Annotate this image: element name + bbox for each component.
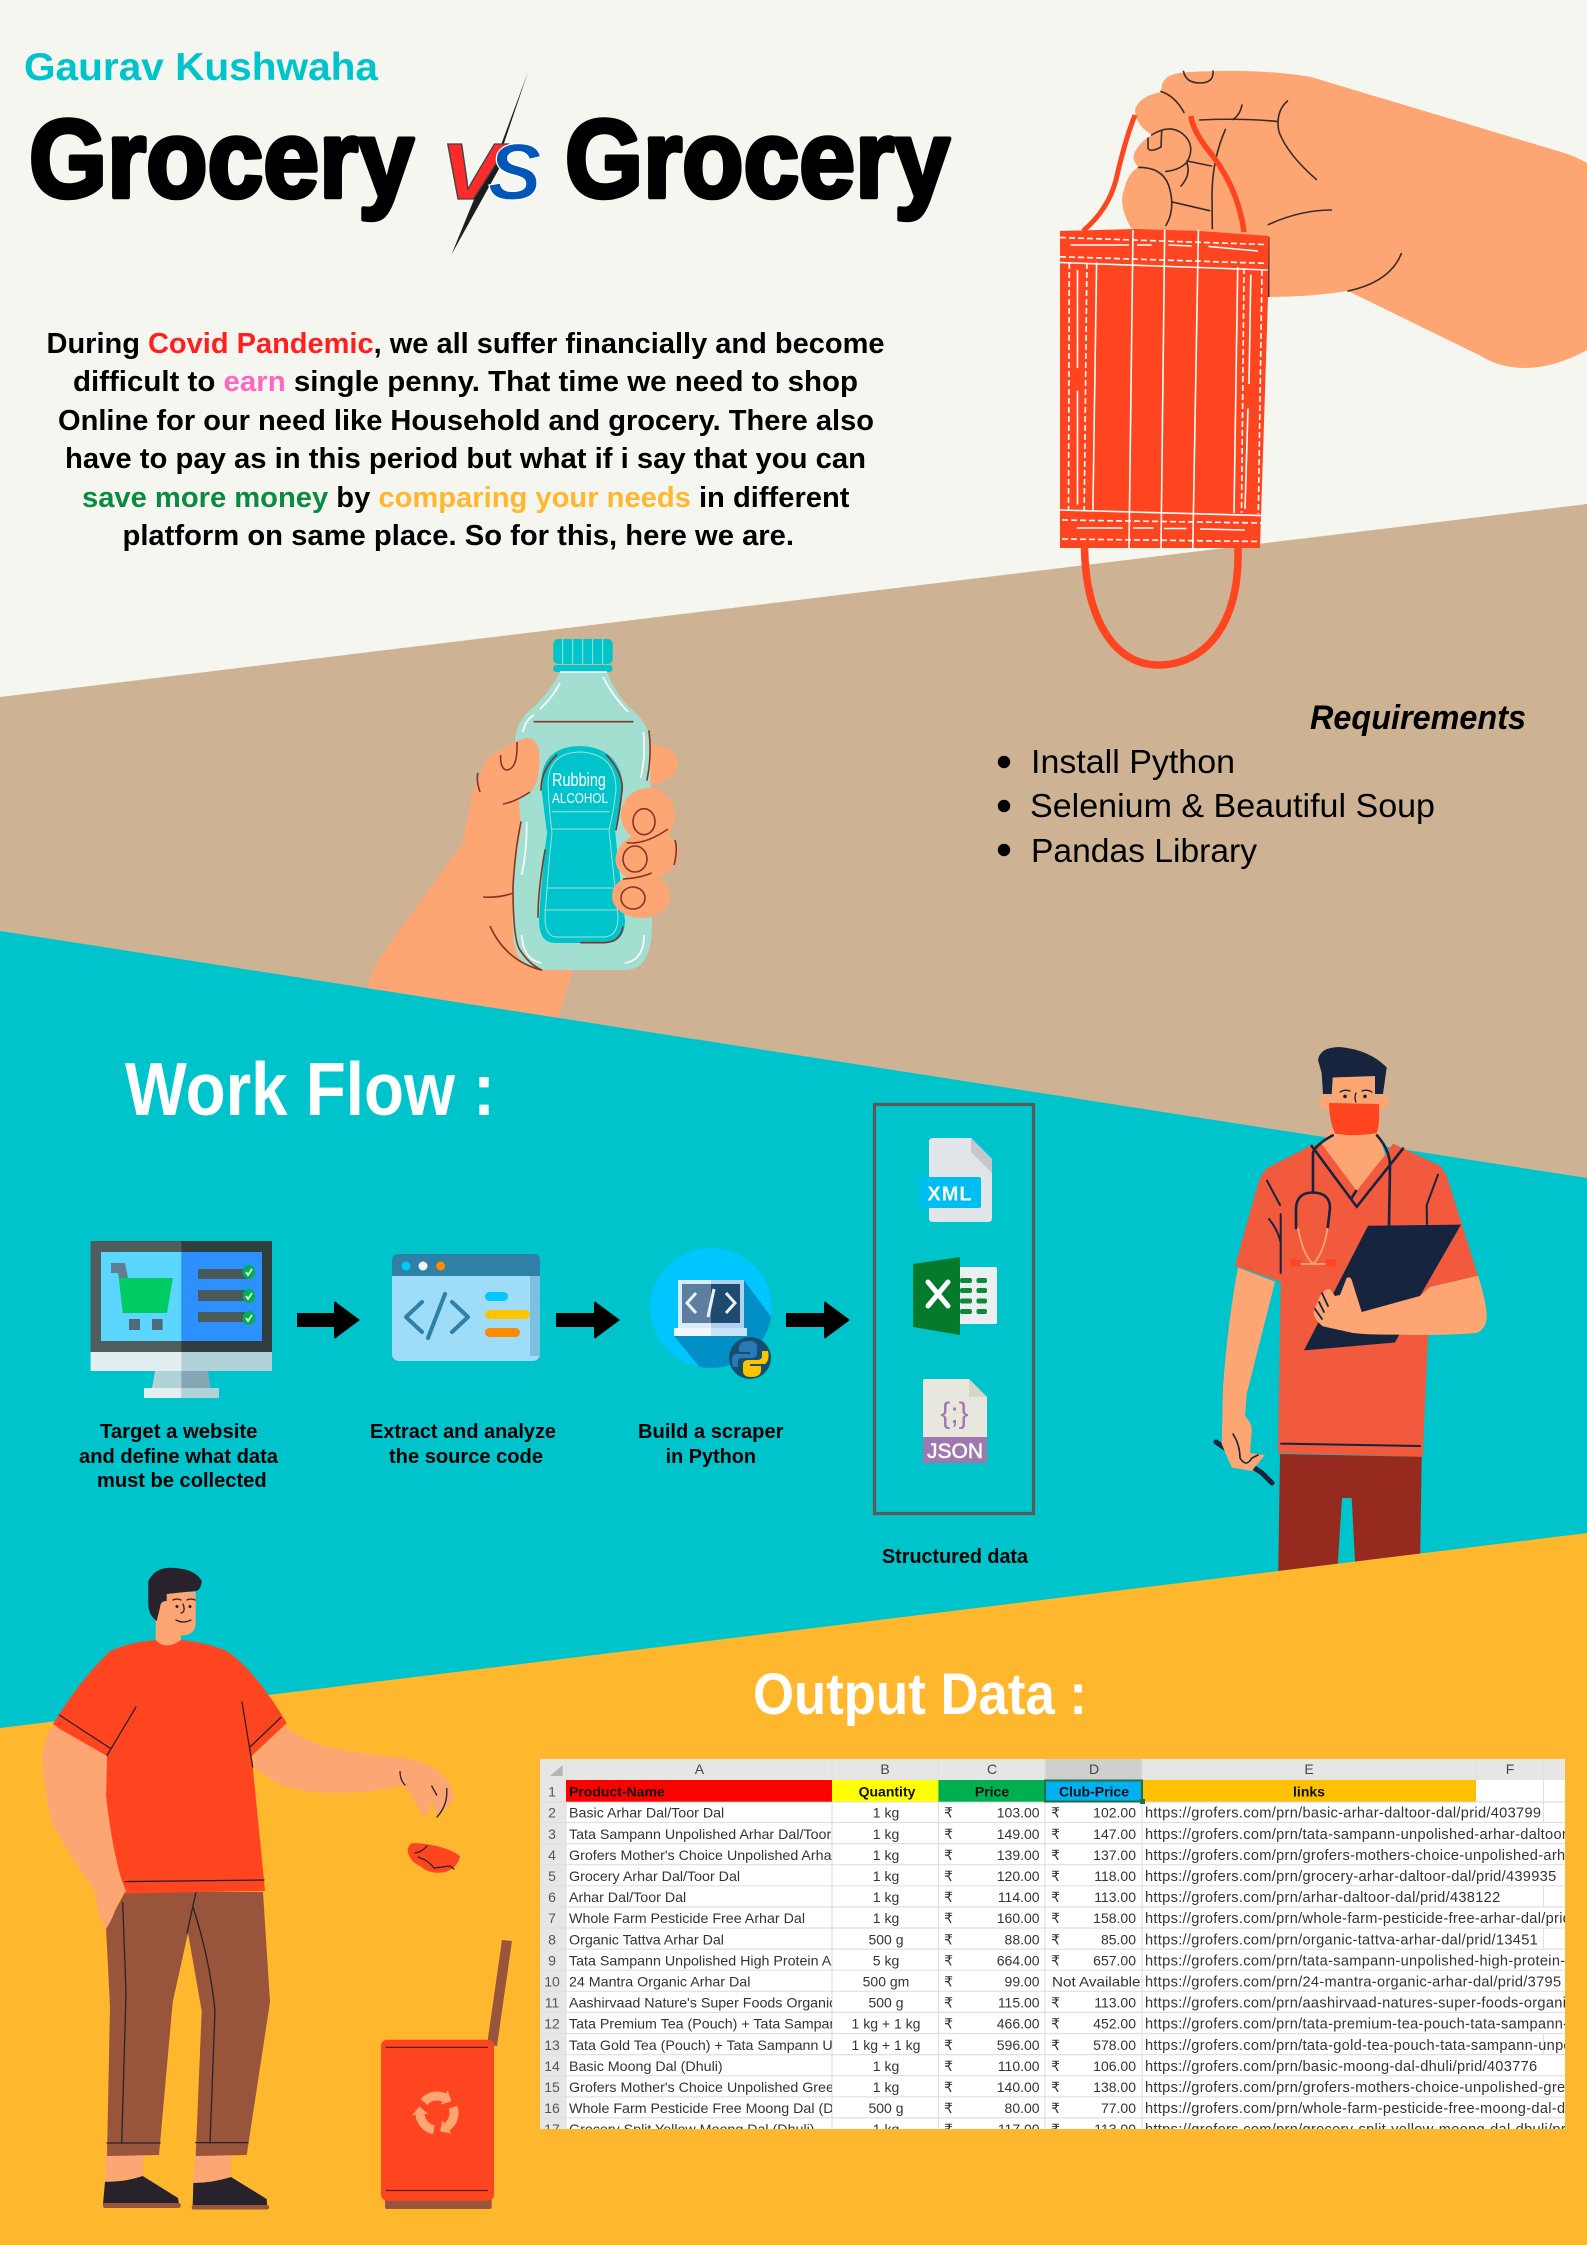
right arm	[253, 1725, 453, 1818]
price column: 466.00	[997, 2016, 1040, 2032]
workflow heading: Work Flow :	[125, 1047, 495, 1131]
price column: ₹	[944, 1868, 953, 1884]
price column: ₹	[944, 2079, 953, 2095]
row numbers: 6	[548, 1889, 556, 1905]
club price column: 452.00	[1093, 2016, 1136, 2032]
links column: https://grofers.com/prn/basic-arhar-daltoor-dal/prid/403799	[1145, 1806, 1541, 1822]
row numbers: 17	[544, 2121, 560, 2137]
club price column: ₹	[1051, 1889, 1060, 1905]
arrow 3	[786, 1302, 850, 1338]
finger and thumb lines	[477, 742, 676, 970]
links column: https://grofers.com/prn/arhar-daltoor-dal/prid/438122	[1145, 1890, 1501, 1906]
price column: ₹	[944, 1995, 953, 2011]
row number strip	[540, 1780, 566, 2129]
shoes	[103, 2176, 269, 2210]
t-shirt	[53, 1640, 287, 1894]
title: first word: Grocery	[29, 98, 414, 221]
price column: 117.00	[998, 2121, 1040, 2137]
links column: https://grofers.com/prn/tata-premium-tea-pouch-tata-sampann-dal	[1145, 2017, 1587, 2033]
scrub seams	[1267, 1146, 1438, 1446]
hand and arm	[1122, 71, 1587, 368]
quantity column: 5 kg	[873, 1952, 899, 1968]
background: yellow band	[0, 1533, 1587, 2245]
icon: JSON file: JSON	[927, 1440, 983, 1463]
quantity column	[852, 1805, 920, 2137]
quantity column: 1 kg	[873, 1805, 899, 1821]
price column: 160.00	[997, 1910, 1040, 1926]
quantity column: 1 kg	[873, 1910, 899, 1926]
illustration: hand palm behind bottle	[360, 745, 678, 1025]
illustration: hand holding face mask	[1060, 71, 1587, 665]
icon: recycle symbol	[410, 2090, 463, 2137]
face and ears	[1319, 1077, 1389, 1137]
icon: JSON file: {;}	[940, 1397, 969, 1430]
structured data box	[874, 1104, 1034, 1568]
illustration: man dropping trash in recycling bin	[42, 1568, 512, 2210]
intro paragraph: Online for our need like Household and grocery. There also	[58, 405, 874, 437]
thumb	[470, 738, 540, 805]
quantity column: 1 kg + 1 kg	[852, 2016, 920, 2032]
author name: Gaurav Kushwaha	[24, 46, 378, 89]
product names column: Basic Moong Dal (Dhuli)	[569, 2059, 723, 2075]
product names column: Arhar Dal/Toor Dal	[569, 1890, 686, 1906]
intro paragraph	[46, 328, 884, 552]
club price column: ₹	[1051, 1995, 1060, 2011]
club price column: 158.00	[1093, 1910, 1136, 1926]
price column: 88.00	[1005, 1931, 1040, 1947]
caption: extract and analyze	[370, 1420, 556, 1468]
caption: extract and analyze: Extract and analyze	[370, 1420, 556, 1443]
price column: ₹	[944, 1931, 953, 1947]
price column: 139.00	[997, 1847, 1040, 1863]
recycling bin	[381, 1940, 512, 2209]
hand contour lines	[1138, 71, 1401, 297]
club price column: 113.00	[1094, 2121, 1136, 2137]
header row: Club-Price	[1059, 1783, 1129, 1799]
title	[29, 72, 950, 254]
row numbers: 5	[548, 1868, 556, 1884]
club price column: 147.00	[1093, 1826, 1136, 1842]
club price column: ₹	[1051, 2058, 1060, 2074]
links column: https://grofers.com/prn/whole-farm-pesticide-free-moong-dal-dhuli	[1145, 2101, 1587, 2117]
requirements list: Selenium & Beautiful Soup	[1030, 787, 1435, 824]
price column: 115.00	[998, 1995, 1040, 2011]
label text	[552, 770, 608, 807]
finger lines	[1315, 1293, 1328, 1319]
grid lines	[540, 1759, 1565, 2129]
price column: 80.00	[1005, 2100, 1040, 2116]
quantity column: 1 kg	[873, 2079, 899, 2095]
price column: 99.00	[1005, 1974, 1040, 1990]
trouser lines	[107, 1892, 248, 2143]
club price column: ₹	[1051, 2121, 1060, 2137]
pen	[1216, 1442, 1272, 1483]
price column: 114.00	[998, 1889, 1040, 1905]
club price column: 138.00	[1093, 2079, 1136, 2095]
club price column: ₹	[1051, 1952, 1060, 1968]
club price column: 113.00	[1094, 1995, 1136, 2011]
price column: ₹	[944, 1952, 953, 1968]
club price column: ₹	[1051, 1805, 1060, 1821]
links column	[1145, 1806, 1587, 2138]
versus letter V: V	[440, 127, 509, 216]
bottle cap	[553, 639, 613, 672]
title: second word: Grocery	[565, 98, 950, 221]
row numbers: 1	[548, 1783, 556, 1799]
club price column: 85.00	[1101, 1931, 1136, 1947]
intro paragraph: During Covid Pandemic, we all suffer financially and become	[46, 328, 884, 360]
product names column: Grofers Mother's Choice Unpolished Green	[569, 2080, 842, 2096]
price column: ₹	[944, 2100, 953, 2116]
row numbers: 13	[544, 2037, 560, 2053]
t-shirt lines	[59, 1702, 281, 1882]
label text: Rubbing	[552, 770, 606, 790]
product names column: Tata Gold Tea (Pouch) + Tata Sampann Unpolished	[569, 2038, 894, 2054]
row numbers: 14	[544, 2058, 560, 2074]
links column: https://grofers.com/prn/tata-sampann-unpolished-arhar-daltoor-dal	[1145, 1827, 1587, 1843]
product names column: Whole Farm Pesticide Free Moong Dal (Dhuli)	[569, 2101, 860, 2117]
row numbers: 11	[545, 1995, 559, 2011]
price column: ₹	[944, 1974, 953, 1990]
eyes	[1340, 1090, 1372, 1102]
row numbers: 15	[544, 2079, 560, 2095]
label inner outline	[544, 752, 618, 937]
checklist	[198, 1265, 255, 1325]
arrow 2	[556, 1302, 620, 1338]
club price column: Not Available	[1052, 1974, 1141, 1990]
versus letter S: S	[488, 127, 541, 216]
links column: https://grofers.com/prn/whole-farm-pesticide-free-arhar-dal/prid	[1145, 1911, 1571, 1927]
row numbers: 16	[544, 2100, 560, 2116]
row numbers: 2	[548, 1805, 556, 1821]
product names column: Organic Tattva Arhar Dal	[569, 1932, 724, 1948]
price column: ₹	[944, 1910, 953, 1926]
price column: 149.00	[997, 1826, 1040, 1842]
caption: target a website	[79, 1420, 279, 1492]
club price column: 118.00	[1094, 1868, 1136, 1884]
quantity column: 1 kg	[873, 1868, 899, 1884]
club price column: ₹	[1051, 1910, 1060, 1926]
header row: Product-Name	[569, 1783, 665, 1799]
caption: build a scraper: Build a scraper	[638, 1420, 784, 1443]
column headers strip: F	[1506, 1761, 1514, 1777]
column headers strip: B	[880, 1761, 890, 1777]
price column: 596.00	[997, 2037, 1040, 2053]
intro paragraph: platform on same place. So for this, here we are.	[122, 520, 794, 552]
hair	[1318, 1047, 1387, 1094]
price column: ₹	[944, 2016, 953, 2032]
legs	[105, 2150, 231, 2184]
product names column: Grofers Mother's Choice Unpolished Arhar Dal	[569, 1848, 862, 1864]
background: tan band	[0, 504, 1587, 1200]
hair	[148, 1568, 202, 1621]
quantity column: 1 kg + 1 kg	[852, 2037, 920, 2053]
price column: ₹	[944, 1805, 953, 1821]
club price column: 657.00	[1093, 1952, 1136, 1968]
requirements list: Install Python	[1031, 743, 1235, 780]
price column: ₹	[944, 1889, 953, 1905]
clipboard	[1304, 1225, 1461, 1350]
bottle contour lines	[513, 722, 650, 970]
price column	[944, 1805, 1040, 2137]
row numbers: 9	[548, 1952, 556, 1968]
quantity column: 1 kg	[873, 2058, 899, 2074]
product names column: Grocery Arhar Dal/Toor Dal	[569, 1869, 740, 1885]
icon: code window	[392, 1254, 540, 1361]
caption: target a website: must be collected	[97, 1469, 267, 1492]
row numbers: 12	[544, 2016, 560, 2032]
product names column: Basic Arhar Dal/Toor Dal	[569, 1806, 724, 1822]
lightning slash	[452, 72, 528, 254]
trousers	[1278, 1454, 1422, 1590]
requirements heading: Requirements	[1310, 699, 1526, 737]
bottle body	[512, 672, 652, 970]
quantity column: 500 gm	[863, 1974, 909, 1990]
club price column: ₹	[1051, 1868, 1060, 1884]
links column: https://grofers.com/prn/grocery-arhar-daltoor-dal/prid/439935	[1145, 1869, 1557, 1885]
output heading: Output Data :	[753, 1662, 1087, 1727]
row numbers: 7	[548, 1910, 556, 1926]
quantity column: 1 kg	[873, 1826, 899, 1842]
icon: monitor with shopping cart	[91, 1241, 272, 1398]
falling trash	[408, 1843, 460, 1873]
product names column: Tata Sampann Unpolished High Protein Arhar	[569, 1953, 857, 1969]
neck and chest	[1322, 1125, 1385, 1195]
face mask	[1329, 1103, 1379, 1135]
links column: https://grofers.com/prn/24-mantra-organic-arhar-dal/prid/3795	[1145, 1974, 1561, 1990]
price column: 664.00	[997, 1952, 1040, 1968]
fingers	[610, 788, 684, 918]
requirements list: Pandas Library	[1031, 832, 1258, 869]
illustration: doctor with clipboard	[1216, 1047, 1487, 1590]
icon: XML file	[919, 1138, 992, 1222]
price column: 103.00	[997, 1805, 1040, 1821]
column headers strip: D	[1089, 1761, 1099, 1777]
product names column: Aashirvaad Nature's Super Foods Organic Dal	[569, 1996, 862, 2012]
face details	[173, 1599, 195, 1622]
icon: laptop with python logo	[650, 1248, 775, 1379]
label text: ALCOHOL	[552, 790, 608, 807]
requirements list	[998, 743, 1435, 869]
header row	[566, 1780, 1476, 1804]
arrow 1	[297, 1302, 360, 1338]
product names column: Whole Farm Pesticide Free Arhar Dal	[569, 1911, 805, 1927]
mask straps	[1083, 115, 1244, 665]
intro paragraph: save more money by comparing your needs in different	[82, 482, 850, 514]
product names column: Grocery Split Yellow Moong Dal (Dhuli)	[569, 2122, 815, 2138]
header row: links	[1293, 1783, 1325, 1799]
icon: XML file: XML	[927, 1184, 973, 1206]
links column: https://grofers.com/prn/grofers-mothers-choice-unpolished-green	[1145, 2080, 1582, 2096]
product names column: Tata Premium Tea (Pouch) + Tata Sampann Dal	[569, 2017, 871, 2033]
price column: ₹	[944, 2058, 953, 2074]
trousers	[106, 1892, 270, 2156]
header row: Quantity	[859, 1783, 916, 1799]
row numbers: 10	[544, 1974, 560, 1990]
product names column	[569, 1808, 832, 2129]
price column: ₹	[944, 1826, 953, 1842]
illustration: rubbing alcohol bottle in hand	[470, 639, 684, 970]
links column: https://grofers.com/prn/grocery-split-yellow-moong-dal-dhuli/prid	[1145, 2122, 1578, 2138]
quantity column: 500 g	[868, 1931, 904, 1947]
row numbers: 8	[548, 1931, 556, 1947]
python logo	[729, 1337, 771, 1379]
quantity column: 1 kg	[873, 2121, 899, 2137]
mask body	[1060, 229, 1269, 548]
links column: https://grofers.com/prn/grofers-mothers-choice-unpolished-arhar	[1145, 1848, 1579, 1864]
club price column: ₹	[1051, 2016, 1060, 2032]
mask stitching	[1060, 230, 1268, 548]
header row: Price	[975, 1783, 1009, 1799]
quantity column: 500 g	[868, 2100, 904, 2116]
club price column: 578.00	[1093, 2037, 1136, 2053]
left arm and hand in pocket	[42, 1725, 126, 1929]
quantity column: 1 kg	[873, 1847, 899, 1863]
quantity column: 1 kg	[873, 1889, 899, 1905]
spreadsheet: output data table	[540, 1759, 1587, 2138]
hand lines	[400, 1772, 447, 1817]
price column: 140.00	[997, 2079, 1040, 2095]
product names column: Tata Sampann Unpolished Arhar Dal/Toor Dal	[569, 1827, 857, 1843]
club price column: ₹	[1051, 2079, 1060, 2095]
cart	[111, 1263, 173, 1330]
price column: 120.00	[997, 1868, 1040, 1884]
neck and face	[156, 1592, 196, 1646]
structured data caption: Structured data	[882, 1546, 1029, 1568]
row numbers	[545, 1787, 560, 2129]
club price column: 102.00	[1093, 1805, 1136, 1821]
product names column: 24 Mantra Organic Arhar Dal	[569, 1974, 750, 1990]
caption: target a website: Target a website	[100, 1420, 257, 1443]
icon: Excel file	[913, 1257, 997, 1335]
club price column: ₹	[1051, 1826, 1060, 1842]
price column: ₹	[944, 2037, 953, 2053]
caption: extract and analyze: the source code	[389, 1445, 543, 1468]
caption: build a scraper	[638, 1420, 784, 1468]
left arm and hand	[1222, 1268, 1275, 1471]
column headers strip	[540, 1759, 1565, 1780]
price column: ₹	[944, 1847, 953, 1863]
club price column: ₹	[1051, 1847, 1060, 1863]
club price column: ₹	[1051, 2037, 1060, 2053]
club price column: 106.00	[1093, 2058, 1136, 2074]
caption: build a scraper: in Python	[666, 1445, 756, 1468]
column headers strip: E	[1304, 1761, 1314, 1777]
intro paragraph: have to pay as in this period but what if i say that you can	[65, 443, 866, 475]
row numbers: 4	[548, 1847, 556, 1863]
price column: ₹	[944, 2121, 953, 2137]
links column: https://grofers.com/prn/basic-moong-dal-dhuli/prid/403776	[1145, 2059, 1537, 2075]
column headers strip: A	[695, 1761, 705, 1777]
price column: 110.00	[998, 2058, 1040, 2074]
club price column: 113.00	[1094, 1889, 1136, 1905]
club price column: 77.00	[1101, 2100, 1136, 2116]
bottle highlights	[522, 672, 644, 963]
background: teal band	[0, 931, 1587, 1800]
bottle label	[539, 746, 625, 943]
row numbers: 3	[548, 1826, 556, 1842]
column headers strip: C	[987, 1761, 997, 1777]
club price column: ₹	[1051, 2100, 1060, 2116]
scrub top	[1235, 1144, 1478, 1457]
forearm and hand over clipboard	[1314, 1276, 1487, 1335]
club price column: ₹	[1051, 1931, 1060, 1947]
caption: target a website: and define what data	[79, 1445, 279, 1468]
quantity column: 500 g	[868, 1995, 904, 2011]
links column: https://grofers.com/prn/aashirvaad-natures-super-foods-organic-dal	[1145, 1996, 1587, 2012]
stethoscope	[1290, 1135, 1390, 1266]
hand line	[1233, 1434, 1258, 1463]
club price column: 137.00	[1093, 1847, 1136, 1863]
club price column	[1051, 1805, 1141, 2137]
icon: JSON file	[923, 1379, 987, 1463]
intro paragraph: difficult to earn single penny. That time we need to shop	[73, 366, 858, 398]
links column: https://grofers.com/prn/organic-tattva-arhar-dal/prid/13451	[1145, 1932, 1538, 1948]
